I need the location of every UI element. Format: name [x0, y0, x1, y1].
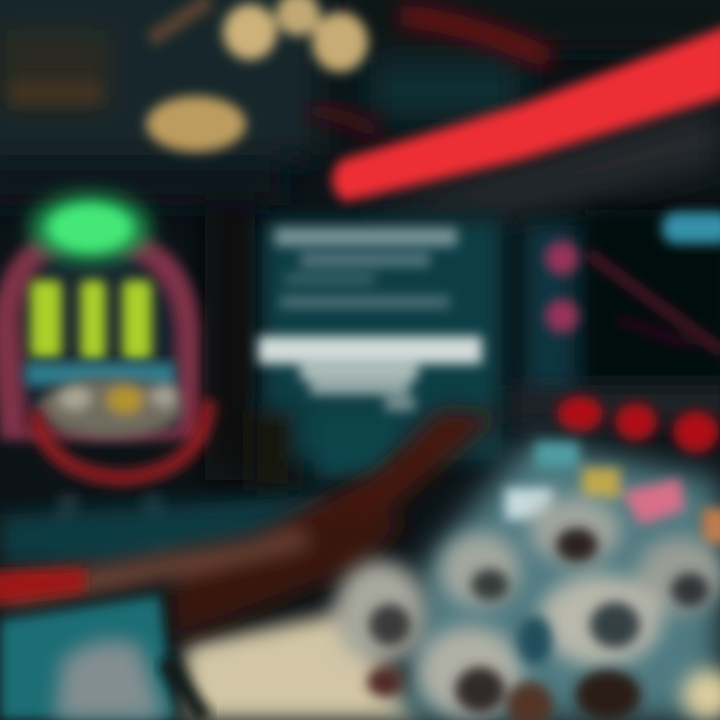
teal table corner	[0, 595, 175, 720]
icon: red buttons	[557, 396, 719, 453]
dark red ceiling streak	[400, 15, 550, 60]
red felt strip	[0, 568, 85, 604]
glowing light bottom right	[682, 669, 720, 720]
brown table edge	[0, 410, 500, 640]
poker chips	[334, 496, 720, 720]
green top light	[48, 204, 132, 252]
panel: centre teal sign	[250, 220, 502, 490]
panel: right dark screen	[510, 210, 720, 425]
icon: pink indicators	[545, 241, 579, 333]
blurred text block	[258, 228, 482, 410]
red base ring	[35, 400, 208, 478]
stand	[60, 495, 165, 550]
icon: blue screen light	[662, 212, 720, 244]
green top glow	[30, 194, 150, 262]
machine body	[0, 225, 200, 440]
grey chair	[55, 640, 165, 720]
floor and lower left table	[0, 495, 420, 720]
red neon bar	[332, 25, 720, 202]
coin tray	[38, 378, 182, 438]
poker table surface	[400, 440, 720, 720]
coloured table tiles	[505, 442, 720, 544]
ceiling lamps	[10, 0, 368, 152]
lower blue band	[25, 362, 175, 386]
background: ceiling and walls	[0, 0, 720, 480]
jukebox machine	[0, 194, 208, 550]
yellow-green reels	[30, 280, 152, 360]
chart lines on right screen	[590, 255, 720, 350]
